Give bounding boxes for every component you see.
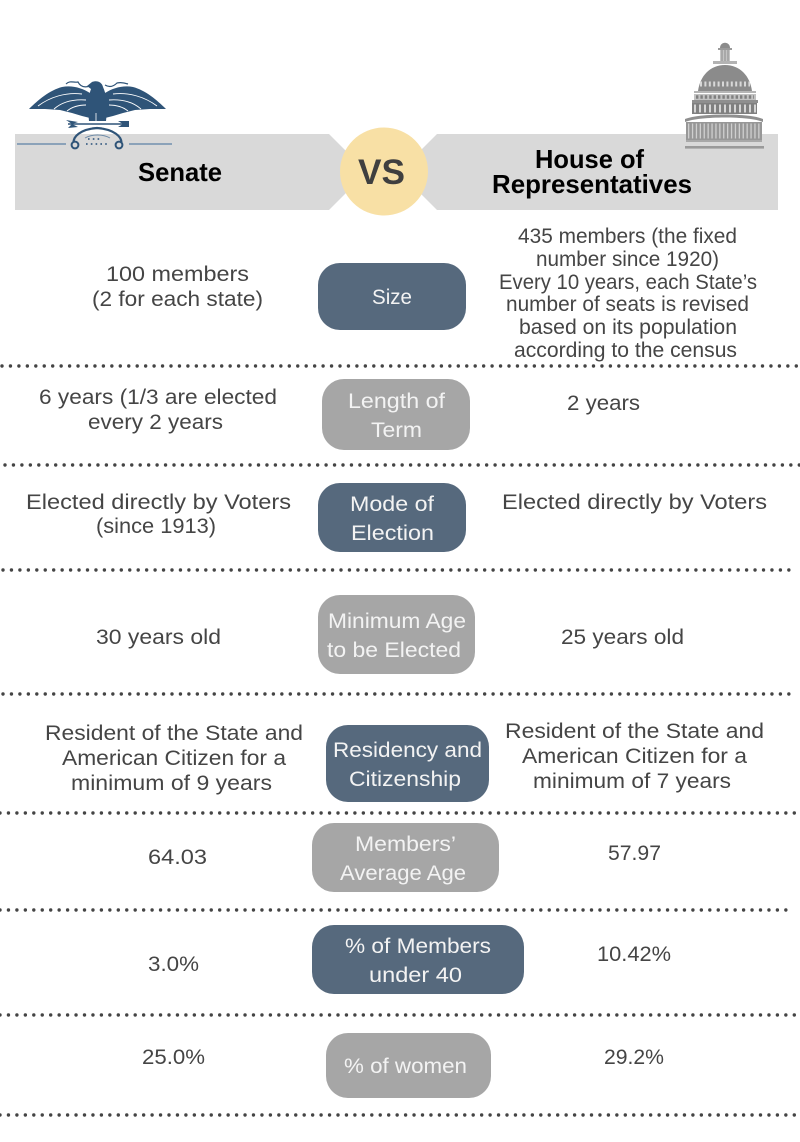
House under 40: 10.42% (597, 943, 671, 966)
VS badge (340, 128, 428, 216)
label pill: Minimum Age to be Elected: Minimum Age (328, 610, 466, 633)
House minimum age: 25 years old (561, 626, 684, 649)
Senate women: 25.0% (142, 1046, 205, 1069)
Senate size (92, 263, 263, 311)
Senate average age: 64.03 (148, 846, 207, 869)
label pill: Size: Size (372, 286, 412, 309)
House size: number of seats is revised (506, 293, 749, 316)
label pill: Residency and Citizenship (326, 725, 489, 802)
row: Residency and Citizenship (45, 720, 764, 802)
row: Minimum Age (96, 595, 684, 674)
heading: House of Representatives: House of (535, 144, 644, 174)
label pill: Members' Average Age (312, 823, 499, 892)
row: Length of Term (39, 379, 640, 450)
House size: 435 members (the fixed (518, 225, 737, 248)
Senate term: 6 years (1/3 are elected (39, 386, 277, 409)
Senate residency: minimum of 9 years (71, 772, 272, 795)
House women: 29.2% (604, 1046, 664, 1069)
label pill: Size (318, 263, 466, 330)
label pill: Length of Term: Term (371, 419, 422, 442)
VS badge: VS (358, 153, 405, 192)
label pill: % of Members under 40: % of Members (345, 935, 491, 958)
banner: House of Representatives (399, 134, 778, 210)
Senate election: Elected directly by Voters (26, 491, 291, 514)
House term: 2 years (567, 392, 640, 415)
icon: Senate eagle seal (17, 81, 172, 148)
row: % of Members under 40 (148, 925, 671, 994)
Senate residency (45, 722, 303, 795)
label pill: Minimum Age to be Elected (318, 595, 475, 674)
header: comparison banner (15, 128, 778, 216)
label pill: Members' Average Age: Members’ (355, 833, 456, 856)
label pill: Mode of Election: Mode of (350, 493, 434, 516)
Senate term: every 2 years (88, 411, 223, 434)
banner: Senate (15, 134, 367, 210)
Senate minimum age: 30 years old (96, 626, 221, 649)
label pill: Residency and Citizenship: Residency and (333, 739, 482, 762)
House size: based on its population (519, 316, 737, 339)
Senate term (39, 386, 277, 434)
label pill: Mode of Election (318, 483, 466, 552)
Senate residency: American Citizen for a (62, 747, 286, 770)
label pill: % of women: % of women (344, 1055, 467, 1078)
Senate election: (since 1913) (96, 515, 216, 538)
label pill: % of Members under 40: under 40 (369, 964, 462, 987)
row: Mode of Election (26, 483, 767, 552)
Senate size: 100 members (106, 263, 249, 286)
label pill: Minimum Age to be Elected: to be Elected (327, 639, 461, 662)
House size: Every 10 years, each State’s (499, 271, 757, 294)
row: Size (92, 225, 757, 362)
House size: number since 1920) (536, 248, 719, 271)
label pill: % of women (326, 1033, 491, 1098)
row: Members' Average Age (148, 823, 661, 892)
House election: Elected directly by Voters (502, 491, 767, 514)
label pill: Length of Term: Length of (348, 390, 445, 413)
label pill: Length of Term (322, 379, 470, 450)
House size: according to the census (514, 339, 737, 362)
label pill: Residency and Citizenship: Citizenship (349, 768, 461, 791)
House residency: Resident of the State and (505, 720, 764, 743)
House size (499, 225, 757, 362)
House residency: American Citizen for a (522, 745, 747, 768)
Senate size: (2 for each state) (92, 288, 263, 311)
label pill: Members' Average Age: Average Age (340, 862, 466, 885)
Senate residency: Resident of the State and (45, 722, 303, 745)
House residency (505, 720, 764, 793)
Senate election (26, 491, 291, 538)
House average age: 57.97 (608, 842, 661, 865)
Senate under 40: 3.0% (148, 953, 199, 976)
House residency: minimum of 7 years (533, 770, 731, 793)
row: % of women (142, 1033, 664, 1098)
label pill: Mode of Election: Election (351, 522, 434, 545)
icon: Capitol dome (685, 43, 764, 149)
heading: Senate: Senate (138, 157, 222, 187)
heading: House of Representatives (492, 144, 692, 199)
label pill: % of Members under 40 (312, 925, 524, 994)
heading: House of Representatives: Representatives (492, 169, 692, 199)
